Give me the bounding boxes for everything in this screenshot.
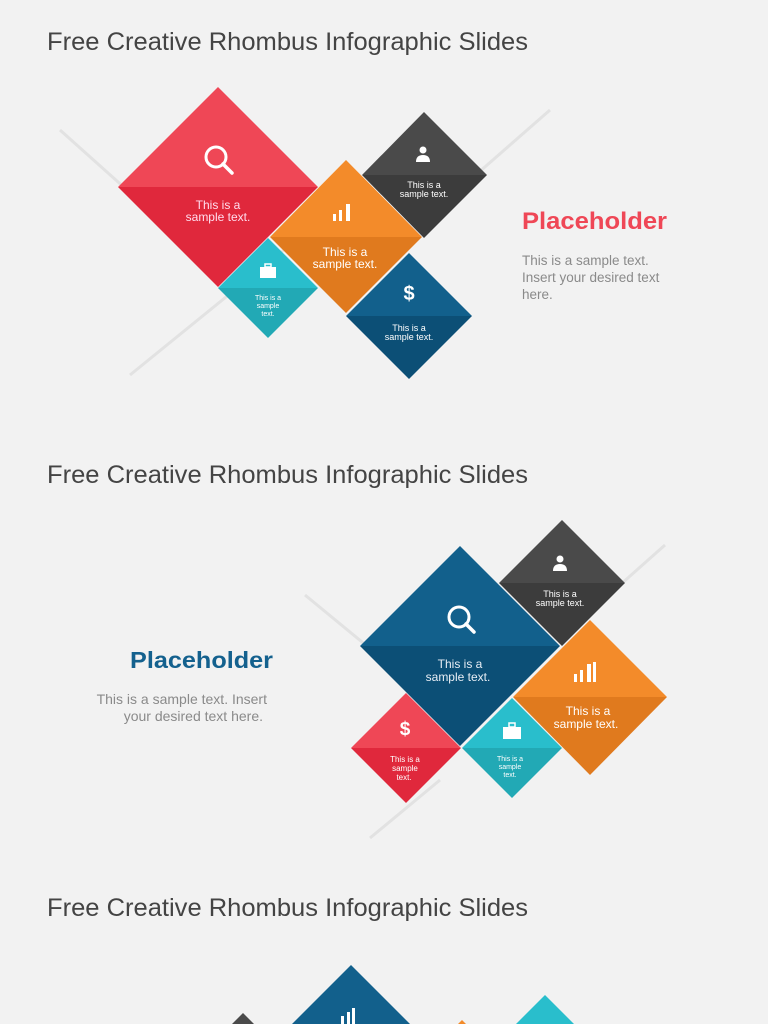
text block: slide 2 placeholder: This is a sample text. Insert [97, 691, 267, 707]
rhombus: orange bars: This is a [566, 704, 611, 718]
rhombus: red dollar: $ [400, 719, 411, 740]
rhombus: red search: sample text. [186, 210, 250, 224]
rhombus: teal briefcase: This is a [497, 756, 523, 763]
rhombus: orange bars: This is a [323, 245, 368, 259]
title: slide 3: Free Creative Rhombus Infographic Slides [47, 894, 528, 922]
rhombus: dark person: sample text. [536, 598, 584, 608]
rhombus: blue dollar: This is a [392, 323, 426, 333]
rhombus: red dollar: sample [392, 764, 418, 773]
rhombus: teal briefcase: sample [499, 764, 521, 771]
rhombus: dark person: This is a [407, 180, 441, 190]
title: slide 2: Free Creative Rhombus Infographic Slides [47, 461, 528, 489]
rhombus: red dollar [351, 693, 461, 803]
rhombus: teal briefcase: This is a [255, 295, 281, 302]
rhombus: orange bars: sample text. [313, 257, 377, 271]
rhombus: red dollar: This is a [390, 755, 420, 764]
text block: slide 1 placeholder [522, 208, 667, 302]
rhombus: teal briefcase: text. [503, 772, 517, 779]
rhombus: teal briefcase [462, 698, 562, 798]
rhombus: orange [442, 1020, 482, 1024]
rhombus: blue [251, 965, 451, 1024]
text block: slide 1 placeholder: This is a sample text. [522, 253, 649, 268]
rhombus: blue dollar: sample text. [385, 332, 433, 342]
rhombus: teal [490, 995, 600, 1024]
rhombus: dark [203, 1013, 283, 1024]
rhombus: dark person: sample text. [400, 189, 448, 199]
rhombus: orange bars [270, 160, 422, 313]
rhombus: dark person [499, 520, 625, 646]
rhombus: blue dollar [346, 253, 472, 379]
rhombus: teal briefcase: sample [257, 303, 279, 310]
text block: slide 2 placeholder: your desired text here. [124, 708, 263, 724]
rhombus: red search [118, 87, 318, 287]
rhombus: orange bars: sample text. [554, 717, 618, 731]
panel: slide 2 rhombus cluster [305, 520, 667, 838]
rhombus: blue search: sample text. [426, 670, 490, 684]
rhombus: red search: This is a [196, 198, 241, 212]
text block: slide 1 placeholder: here. [522, 287, 553, 302]
title: slide 1: Free Creative Rhombus Infographic Slides [47, 28, 528, 56]
rhombus: red dollar: text. [396, 773, 412, 782]
rhombus: blue search: This is a [438, 657, 483, 671]
rhombus: dark person [362, 112, 487, 238]
text block: slide 2 placeholder: Placeholder [130, 647, 273, 673]
rhombus: orange bars [513, 620, 667, 775]
panel: slide 1 rhombus cluster [60, 87, 550, 379]
rhombus: blue dollar: $ [403, 283, 415, 305]
text block: slide 1 placeholder: Placeholder [522, 208, 667, 235]
rhombus: teal briefcase [218, 238, 318, 338]
panel: slide 3 rhombus cluster (cropped) [203, 965, 600, 1024]
text block: slide 1 placeholder: Insert your desired text [522, 270, 660, 285]
text block: slide 2 placeholder [97, 647, 273, 724]
rhombus: dark person: This is a [543, 589, 577, 599]
rhombus: teal briefcase: text. [261, 311, 275, 318]
rhombus: blue search [360, 546, 560, 746]
